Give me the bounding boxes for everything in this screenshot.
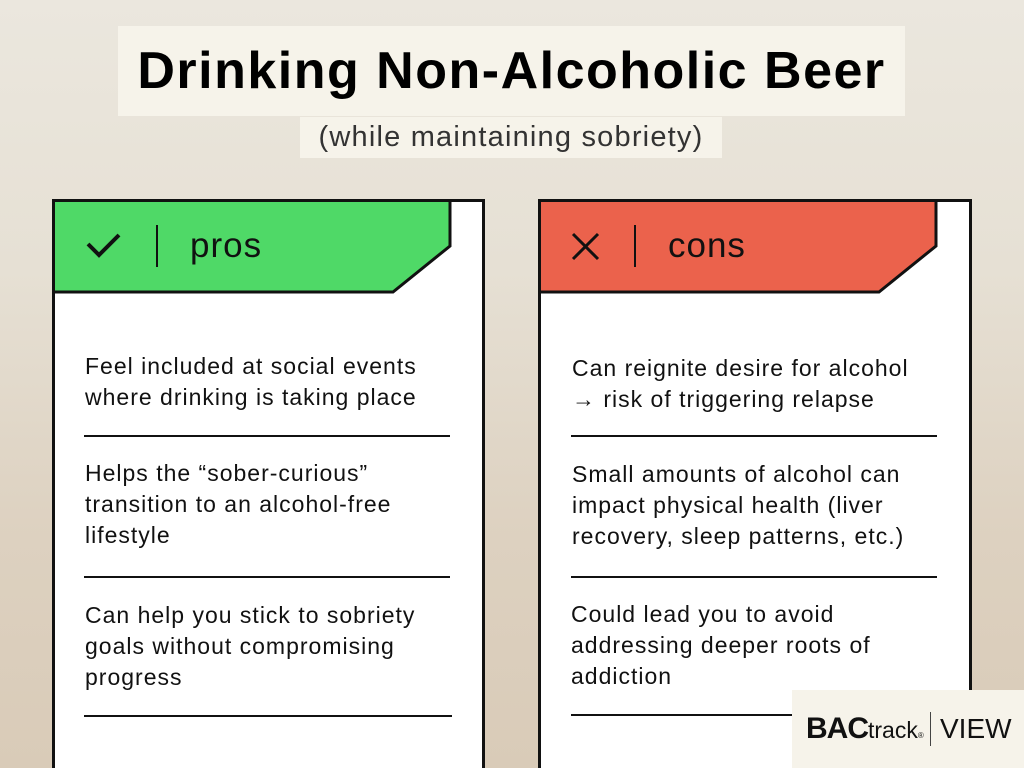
pros item 2: Helps the “sober-curious” (85, 460, 368, 486)
pros header (55, 202, 452, 294)
pros item 3: progress (85, 664, 182, 690)
cons header: cons (668, 226, 746, 265)
pros item 2 (85, 460, 391, 548)
logo: VIEW (940, 713, 1012, 744)
pros item 2: transition to an alcohol-free (85, 491, 391, 517)
pros item 2: lifestyle (85, 522, 171, 548)
cons item 2: Small amounts of alcohol can (572, 461, 900, 487)
subtitle: (while maintaining sobriety) (318, 121, 703, 153)
cons item 1: Can reignite desire for alcohol (572, 355, 909, 381)
cons item 3: addiction (571, 663, 672, 689)
cons item 1 (572, 355, 909, 412)
cons item 3 (571, 601, 871, 689)
cons header (541, 202, 938, 294)
panel: pros (52, 199, 485, 768)
cons item 2: impact physical health (liver (572, 492, 884, 518)
cons item 1: → risk of triggering relapse (572, 386, 875, 412)
cons item 2 (572, 461, 904, 549)
logo (792, 690, 1024, 768)
pros header: pros (190, 226, 262, 265)
title (118, 26, 905, 116)
pros item 1 (85, 353, 417, 410)
logo: BACtrack® (806, 712, 924, 745)
cons item 3: addressing deeper roots of (571, 632, 871, 658)
pros item 3: goals without compromising (85, 633, 395, 659)
panel: cons (538, 199, 972, 768)
pros item 1: where drinking is taking place (85, 384, 417, 410)
pros item 3: Can help you stick to sobriety (85, 602, 415, 628)
title: Drinking Non-Alcoholic Beer (137, 42, 886, 100)
pros item 1: Feel included at social events (85, 353, 417, 379)
cons item 3: Could lead you to avoid (571, 601, 834, 627)
pros item 3 (85, 602, 415, 690)
cons item 2: recovery, sleep patterns, etc.) (572, 523, 904, 549)
